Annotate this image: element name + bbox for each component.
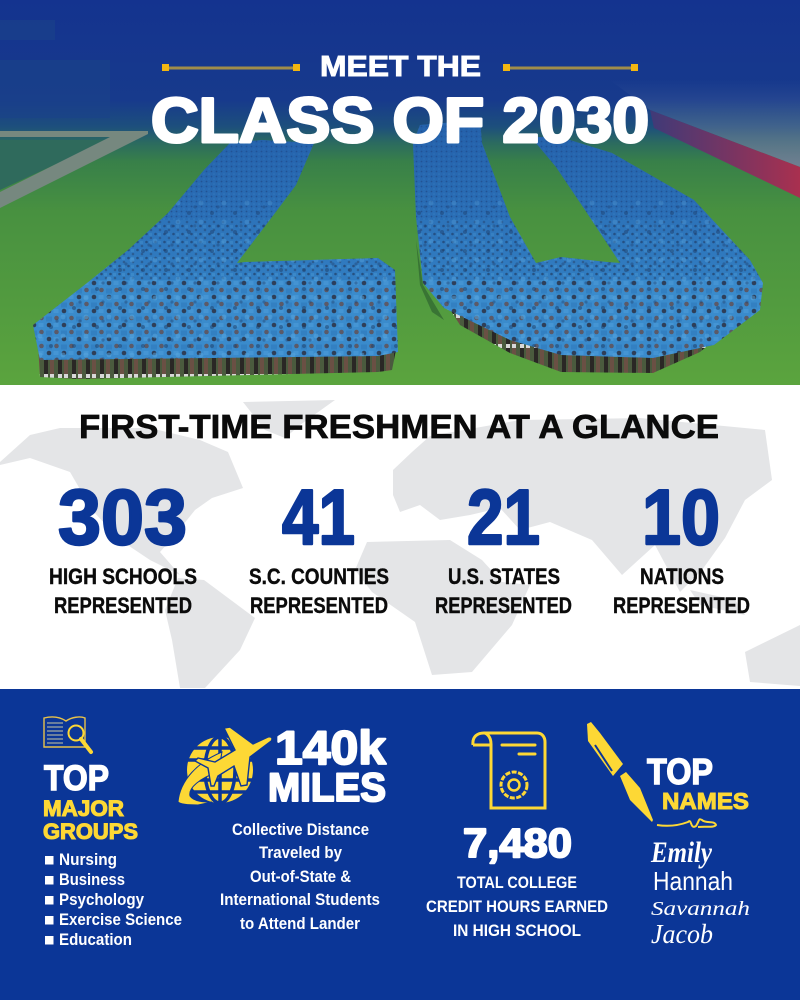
top names [587,722,750,949]
heading: major groups [43,796,138,844]
description: Traveled by [259,844,343,862]
stat: nations: REPRESENTED [613,593,750,618]
heading: top: TOP [44,759,109,798]
figure: 140k: 140k [275,721,387,774]
campus building left [0,20,110,118]
panel: hero photo [0,0,800,385]
title: class of 2030: CLASS OF 2030 [151,86,649,156]
name list: Savannah [651,898,750,920]
lawn patch left [0,140,108,190]
decorative bar left [162,64,300,71]
description: International Students [220,891,380,909]
stat: states [435,473,572,618]
miles travelled [178,721,387,933]
photo background: lawn and campus [0,0,800,385]
top major groups [43,717,182,949]
icon: globe with planes [178,727,272,805]
stat: counties [249,473,389,618]
world map [0,400,800,688]
figure: miles: MILES [268,766,386,810]
heading: major groups: MAJOR [43,796,124,821]
college credit hours [426,733,608,940]
walkway [0,131,148,208]
stat: nations: 10 [642,473,720,561]
crowd shadow [416,240,444,320]
stat: high schools: 303 [58,473,187,561]
icon: pen with signature [587,722,716,827]
list of majors: Exercise Science [59,910,182,929]
panel background [0,689,800,1000]
panel: at a glance [0,385,800,690]
description: Out-of-State & [250,868,351,886]
list of majors: Nursing [59,850,117,869]
list of majors: Business [59,870,125,889]
description: TOTAL COLLEGE [457,874,577,892]
red banner fence [650,110,800,198]
heading: meet the: MEET THE [320,51,481,83]
description: Collective Distance [232,821,369,839]
heading: major groups: GROUPS [43,819,138,844]
stat: states: REPRESENTED [435,593,572,618]
heading: top: TOP [647,751,713,792]
stat: counties: S.C. COUNTIES [249,564,389,589]
description [426,874,608,940]
stat: high schools [49,473,197,618]
stat: nations [613,473,750,618]
stat: states: 21 [467,473,540,561]
panel background [0,385,800,690]
section heading: FIRST-TIME FRESHMEN AT A GLANCE [79,408,719,445]
stat: high schools: REPRESENTED [54,593,192,618]
name list: Jacob [651,919,713,949]
stat: counties: REPRESENTED [250,593,388,618]
panel: bottom stats [0,689,800,1000]
figure: 7,480: 7,480 [463,820,572,866]
icon: book with magnifier [44,717,91,752]
stat: states: U.S. STATES [448,564,560,589]
description: to Attend Lander [240,915,361,933]
plaza right [610,80,800,167]
list of majors: Psychology [59,890,144,909]
stat: nations: NATIONS [640,564,724,589]
description: IN HIGH SCHOOL [453,922,581,940]
stat: counties: 41 [282,473,355,561]
icon: scroll certificate [473,733,545,808]
description [220,821,380,933]
crowd forming letters LU [33,122,763,360]
crowd legs [38,300,745,379]
stat: high schools: HIGH SCHOOLS [49,564,197,589]
name list [650,836,750,949]
name list: Hannah [653,866,733,896]
list of majors: Education [59,930,132,949]
list of majors [45,850,182,949]
description: CREDIT HOURS EARNED [426,898,608,916]
decorative bar right [503,64,638,71]
name list: Emily [650,836,713,869]
heading: names: NAMES [662,788,749,814]
